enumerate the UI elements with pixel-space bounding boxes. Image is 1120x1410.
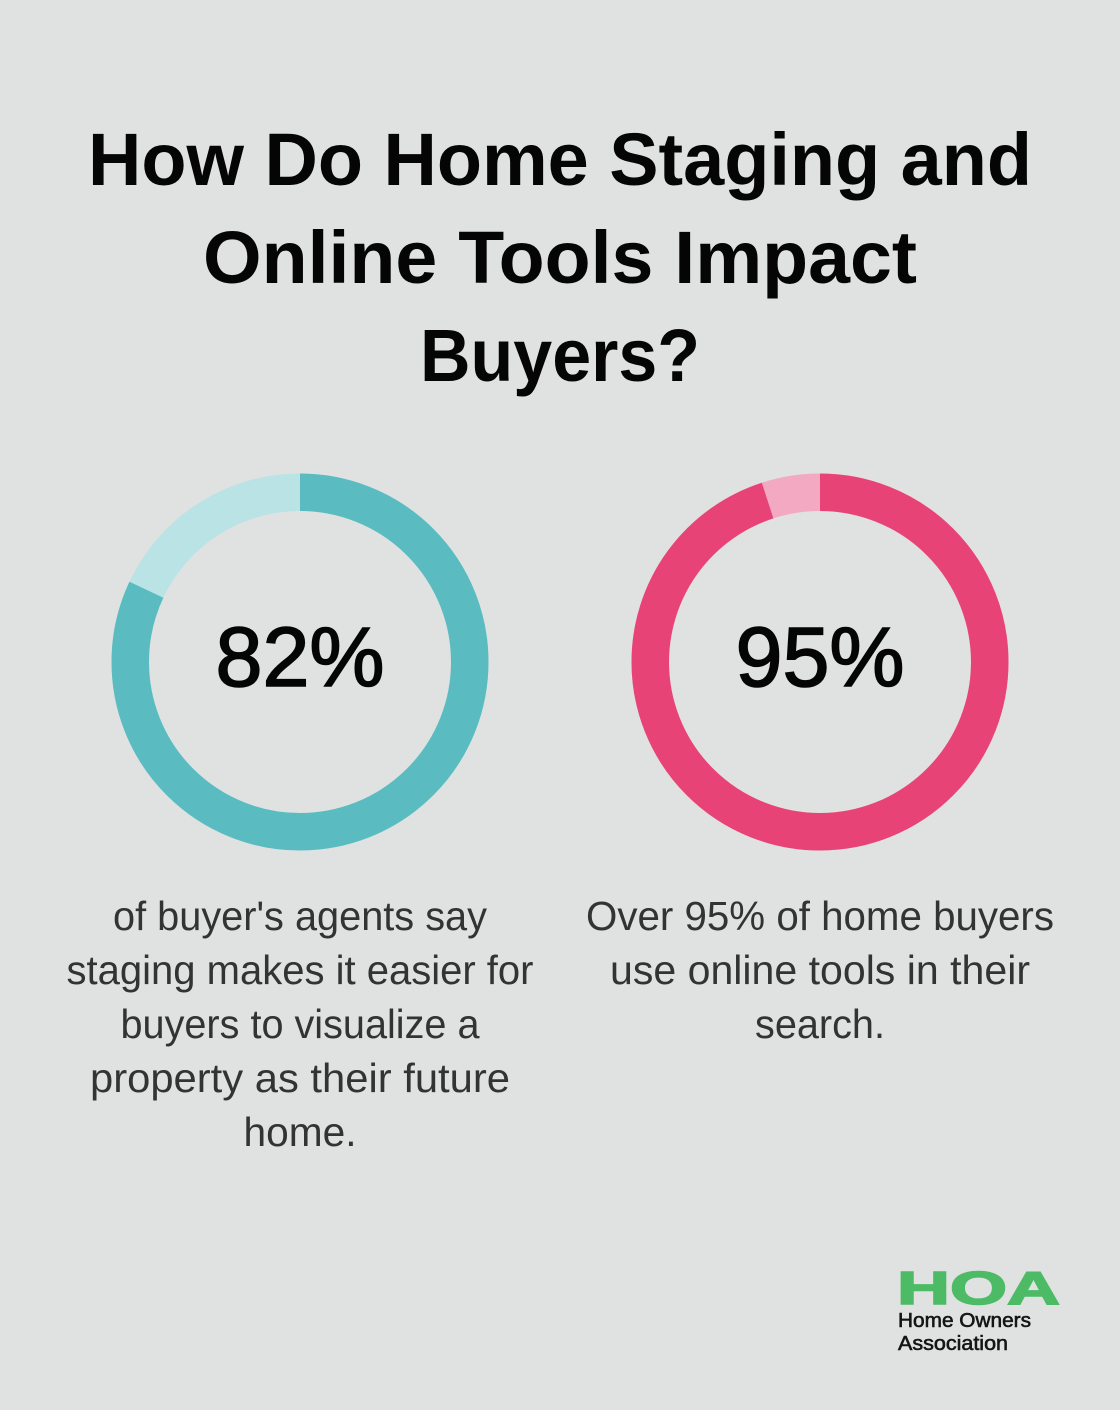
- logo: HOA Home Owners Association: HOA: [897, 1262, 1060, 1314]
- logo: HOA Home Owners Association: Association: [898, 1333, 1008, 1355]
- panel: 82% staging stat: [66, 492, 534, 1155]
- title: [88, 118, 1032, 397]
- description: online tools: Over 95% of home buyers: [586, 893, 1054, 939]
- description: staging: buyers to visualize a: [120, 1001, 480, 1047]
- description: online tools: search.: [755, 1001, 885, 1047]
- description: online tools: [586, 893, 1054, 1047]
- title: How Do Home Staging and: [88, 118, 1032, 201]
- logo: HOA Home Owners Association: [897, 1262, 1060, 1355]
- stat value: 95%: 95%: [736, 610, 904, 704]
- description: staging: home.: [244, 1109, 356, 1155]
- stat value: 82%: 82%: [216, 610, 384, 704]
- description: staging: of buyer's agents say: [113, 893, 487, 939]
- description: staging: staging makes it easier for: [66, 947, 534, 993]
- panel: 95% online tools stat: [586, 492, 1054, 1047]
- title: Buyers?: [420, 314, 700, 397]
- logo: HOA Home Owners Association: Home Owners: [898, 1310, 1031, 1332]
- donut chart: 82%: [130, 492, 470, 832]
- description: online tools: use online tools in their: [610, 947, 1030, 993]
- description: staging: property as their future: [90, 1055, 510, 1101]
- title: Online Tools Impact: [203, 216, 917, 299]
- donut chart: 95%: [650, 492, 990, 832]
- description: staging: [66, 893, 534, 1155]
